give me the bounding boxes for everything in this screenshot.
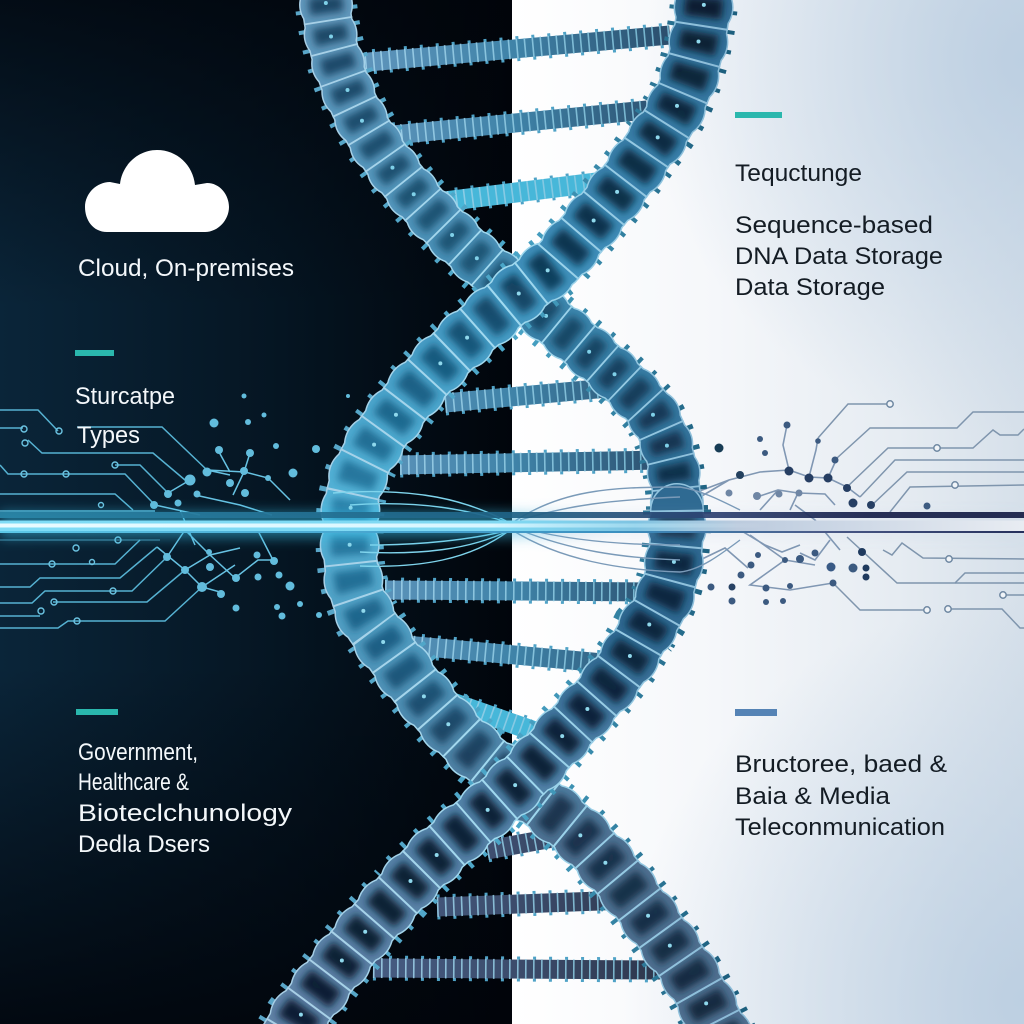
horizontal light beam bbox=[0, 512, 1024, 538]
text: cloud deployment: Cloud, On-premises bbox=[78, 255, 294, 282]
background: dark left half bbox=[0, 0, 512, 1024]
text: technique: Tequctunge bbox=[735, 160, 862, 187]
text: technique bbox=[735, 160, 943, 301]
text: technique: Sequence-based bbox=[735, 212, 933, 239]
text: technique: Data Storage bbox=[735, 274, 885, 301]
text: applications bbox=[735, 751, 947, 841]
DNA strand: first strand lower half, in front bbox=[285, 510, 677, 1024]
background: light right half bbox=[512, 0, 1024, 1024]
DNA base-pair rungs bbox=[357, 35, 670, 970]
background: dark vignette bbox=[0, 0, 512, 1024]
accent bar: structure types bbox=[75, 350, 114, 356]
left particle network bbox=[150, 394, 350, 620]
accent bar: applications bbox=[735, 709, 777, 716]
text: end users bbox=[78, 739, 293, 858]
accent bar: end users bbox=[76, 709, 118, 715]
background: top right shade bbox=[512, 0, 1024, 512]
icon: cloud bbox=[85, 150, 229, 232]
heading: structure types: Sturcatpe bbox=[75, 383, 175, 410]
DNA strand: second strand, crossing over bbox=[350, 0, 725, 1024]
glowing curved lines at helix centre bbox=[333, 487, 740, 572]
text: end users: Healthcare & bbox=[78, 769, 189, 796]
text: end users: Government, bbox=[78, 739, 198, 766]
text: applications: Bructoree, baed & bbox=[735, 751, 947, 778]
DNA strand: first strand upper half, behind bbox=[325, 0, 677, 510]
accent bar: technique bbox=[735, 112, 782, 118]
text: end users: Dedla Dsers bbox=[78, 831, 210, 858]
text: applications: Baia & Media bbox=[735, 783, 890, 810]
text: end users: Bioteclchunology bbox=[78, 800, 293, 827]
heading: structure types bbox=[75, 383, 175, 449]
left circuit traces bbox=[0, 410, 207, 628]
text: applications: Teleconmunication bbox=[735, 814, 945, 841]
heading: structure types: Types bbox=[77, 422, 140, 449]
background: bottom right shade bbox=[512, 512, 1024, 1024]
right particle network bbox=[695, 422, 930, 605]
right circuit traces bbox=[818, 401, 1024, 628]
text: technique: DNA Data Storage bbox=[735, 243, 943, 270]
